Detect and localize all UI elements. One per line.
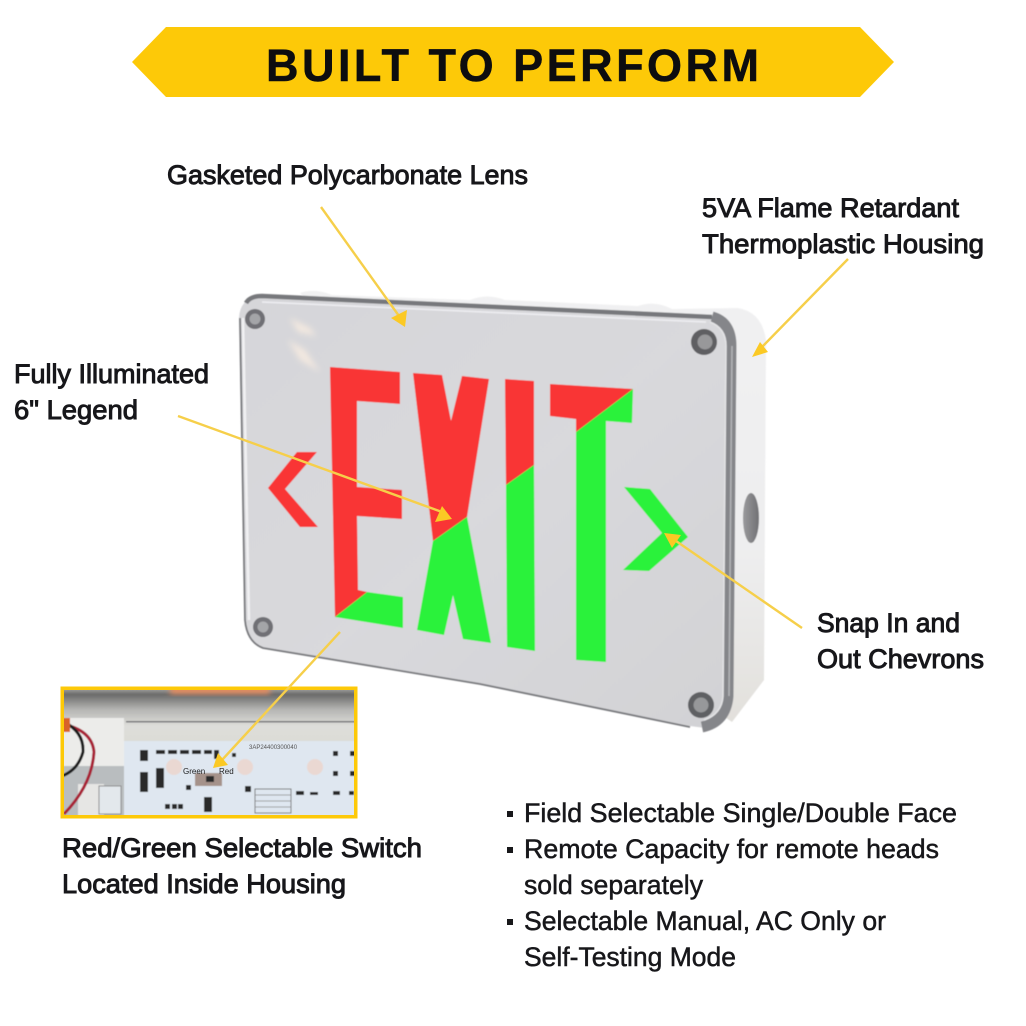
label: legend: Fully Illuminated [14, 359, 209, 389]
lens panel [239, 296, 733, 728]
lens left and bottom edge [240, 318, 690, 727]
feature bullet list: Field Selectable Single/Double Face [524, 798, 957, 828]
label: chevrons: Snap In and [817, 608, 960, 638]
label: housing [702, 193, 984, 259]
label: legend [14, 359, 209, 425]
title banner: BUILT TO PERFORM [266, 40, 759, 91]
label: lens: Gasketed Polycarbonate Lens [167, 160, 528, 190]
bolts [245, 309, 717, 718]
label: chevrons [817, 608, 984, 674]
label: switch: Red/Green Selectable Switch [62, 833, 422, 863]
exit legend green [335, 389, 688, 662]
title banner [132, 27, 894, 97]
label: legend: 6" Legend [14, 395, 138, 425]
feature bullet list: Self-Testing Mode [524, 942, 736, 972]
inset photo: selectable switch: Green [183, 767, 205, 776]
gasket top [246, 296, 712, 317]
side conduit hole [743, 493, 759, 543]
inset photo: selectable switch [60, 686, 358, 818]
inset photo: selectable switch: 3AP24400300040 [249, 745, 298, 751]
callout arrow: switch [213, 632, 340, 768]
feature bullet list: Remote Capacity for remote heads [524, 834, 939, 864]
label: switch: Located Inside Housing [62, 869, 346, 899]
housing body [300, 291, 766, 722]
exit legend red [268, 367, 633, 617]
feature bullet list: sold separately [524, 870, 703, 900]
label: housing: 5VA Flame Retardant [702, 193, 959, 223]
callout arrow: housing [752, 259, 848, 357]
board components [140, 750, 355, 812]
callout arrow: chevrons [664, 533, 802, 628]
inset photo: selectable switch: Red [219, 767, 234, 776]
feature bullet list: Selectable Manual, AC Only or [524, 906, 886, 936]
lens glare [288, 318, 320, 372]
label: chevrons: Out Chevrons [817, 644, 984, 674]
label: housing: Thermoplastic Housing [702, 229, 984, 259]
label: switch [62, 833, 422, 899]
feature bullet list [507, 798, 957, 972]
callout arrow: lens [321, 207, 407, 327]
gasket right [702, 317, 731, 727]
exit sign product [239, 291, 766, 728]
callout arrow: legend [178, 416, 452, 522]
